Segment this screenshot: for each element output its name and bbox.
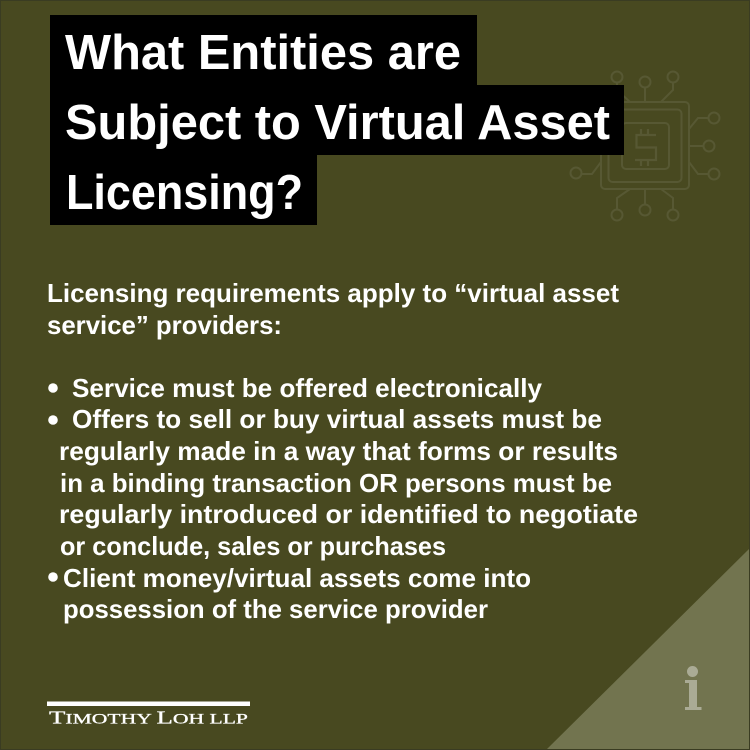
corner triangle <box>547 549 749 749</box>
bullet list: possession of the service provider <box>63 594 488 624</box>
intro text <box>47 278 619 340</box>
bullet list: regularly made in a way that forms or results <box>59 436 618 466</box>
bullet list: Service must be offered electronically <box>72 373 543 403</box>
bullet list: or conclude, sales or purchases <box>60 531 446 561</box>
bullet list: Offers to sell or buy virtual assets must be <box>72 404 602 434</box>
title block: Subject to Virtual Asset <box>65 96 610 150</box>
logo: Timothy Loh LLP <box>47 702 250 728</box>
logo: Timothy Loh LLP: T IMOTHY L OH LLP <box>49 708 248 728</box>
icon: circuit chip with dollar sign <box>570 72 720 220</box>
intro text: service” providers: <box>47 310 282 340</box>
title block: What Entities are <box>65 26 461 80</box>
bullet list: regularly introduced or identified to negotiate <box>59 499 638 529</box>
bullet list: Client money/virtual assets come into <box>63 563 531 593</box>
title block <box>50 15 624 225</box>
icon: info letter <box>685 666 702 710</box>
title block: Licensing? <box>66 166 303 220</box>
bullet list <box>48 373 638 624</box>
intro text: Licensing requirements apply to “virtual asset <box>47 278 619 308</box>
bullet list: in a binding transaction OR persons must be <box>60 468 612 498</box>
